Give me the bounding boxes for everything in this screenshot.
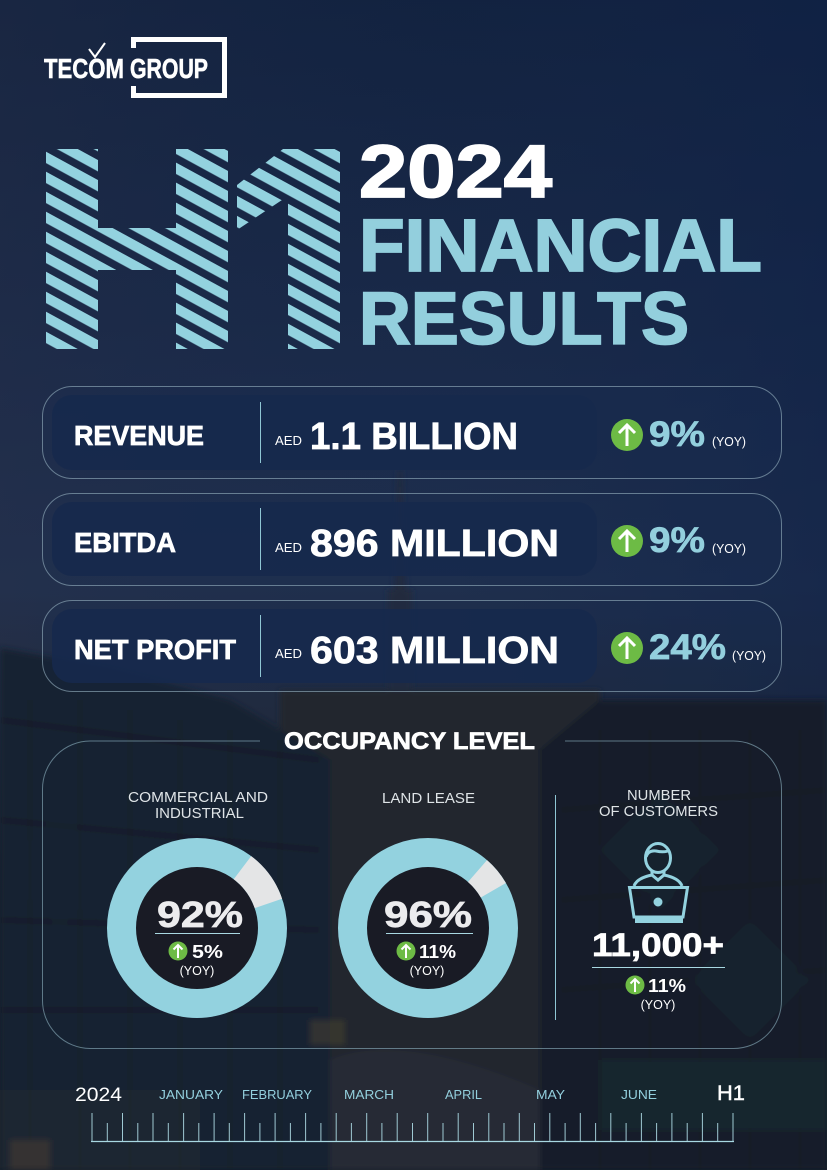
timeline: 2024 to H1: MAY <box>536 1087 565 1102</box>
timeline: 2024 to H1: JANUARY <box>159 1087 223 1102</box>
title: 2024 Financial Results: FINANCIAL <box>359 204 762 287</box>
timeline: 2024 to H1: FEBRUARY <box>242 1087 312 1102</box>
panel: EBITDA: (YOY) <box>712 542 746 556</box>
panel: revenue: (YOY) <box>712 435 746 449</box>
title: 2024 Financial Results: RESULTS <box>359 277 689 360</box>
label: commercial and industrial: COMMERCIAL AND <box>128 789 268 806</box>
stat: 11,000+ customers <box>592 927 725 1012</box>
icon: customer at laptop <box>630 844 688 920</box>
timeline: 2024 to H1 <box>75 1082 745 1142</box>
panel: net profit: (YOY) <box>732 649 766 663</box>
logo: TECOM GROUP <box>44 40 224 96</box>
label: commercial and industrial: INDUSTRIAL <box>155 805 244 822</box>
panel: EBITDA <box>42 494 782 586</box>
donut: 92%: 92% <box>157 894 243 935</box>
label: number of customers: OF CUSTOMERS <box>599 803 718 820</box>
label: land lease: LAND LEASE <box>382 790 475 807</box>
panel: EBITDA: 9% <box>649 521 705 560</box>
title: 2024 Financial Results: 2024 <box>359 130 552 213</box>
panel: net profit <box>42 600 782 692</box>
donut: 92% <box>122 852 282 1004</box>
donut: 96% <box>352 852 506 1004</box>
stat: 11,000+ customers: (YOY) <box>641 998 675 1012</box>
heading: occupancy level: OCCUPANCY LEVEL <box>284 728 535 755</box>
timeline: 2024 to H1: JUNE <box>621 1087 657 1102</box>
panel: net profit: 24% <box>649 628 726 667</box>
timeline: 2024 to H1: MARCH <box>344 1087 394 1102</box>
logo: TECOM GROUP: TECOM <box>44 53 124 84</box>
timeline: 2024 to H1: APRIL <box>445 1087 482 1102</box>
panel: EBITDA: EBITDA <box>74 527 176 558</box>
donut: 96%: (YOY) <box>410 964 444 978</box>
donut: 92%: (YOY) <box>180 964 214 978</box>
panel: net profit: 603 MILLION <box>310 630 559 672</box>
panel: occupancy level <box>42 728 782 1049</box>
panel: EBITDA: 896 MILLION <box>310 523 559 565</box>
panel: revenue <box>42 386 782 478</box>
donut: 96%: 96% <box>384 894 472 935</box>
panel: net profit: AED <box>275 646 302 661</box>
timeline: 2024 to H1: 2024 <box>75 1085 122 1106</box>
logo: TECOM GROUP: GROUP <box>130 53 208 84</box>
H1 striped lettering <box>40 145 345 355</box>
panel: revenue: 9% <box>649 415 705 454</box>
stat: 11,000+ customers: 11,000+ <box>592 927 724 963</box>
stat: 11,000+ customers: 11% <box>648 976 686 996</box>
panel: revenue: AED <box>275 433 302 448</box>
donut: 96%: 11% <box>419 942 456 962</box>
panel: revenue: 1.1 BILLION <box>310 416 518 458</box>
label: number of customers: NUMBER <box>627 787 691 804</box>
title: 2024 Financial Results <box>359 130 762 360</box>
timeline: 2024 to H1: H1 <box>717 1082 745 1105</box>
panel: EBITDA: AED <box>275 540 302 555</box>
panel: net profit: NET PROFIT <box>74 634 236 665</box>
donut: 92%: 5% <box>192 942 223 962</box>
panel: revenue: REVENUE <box>74 420 204 451</box>
